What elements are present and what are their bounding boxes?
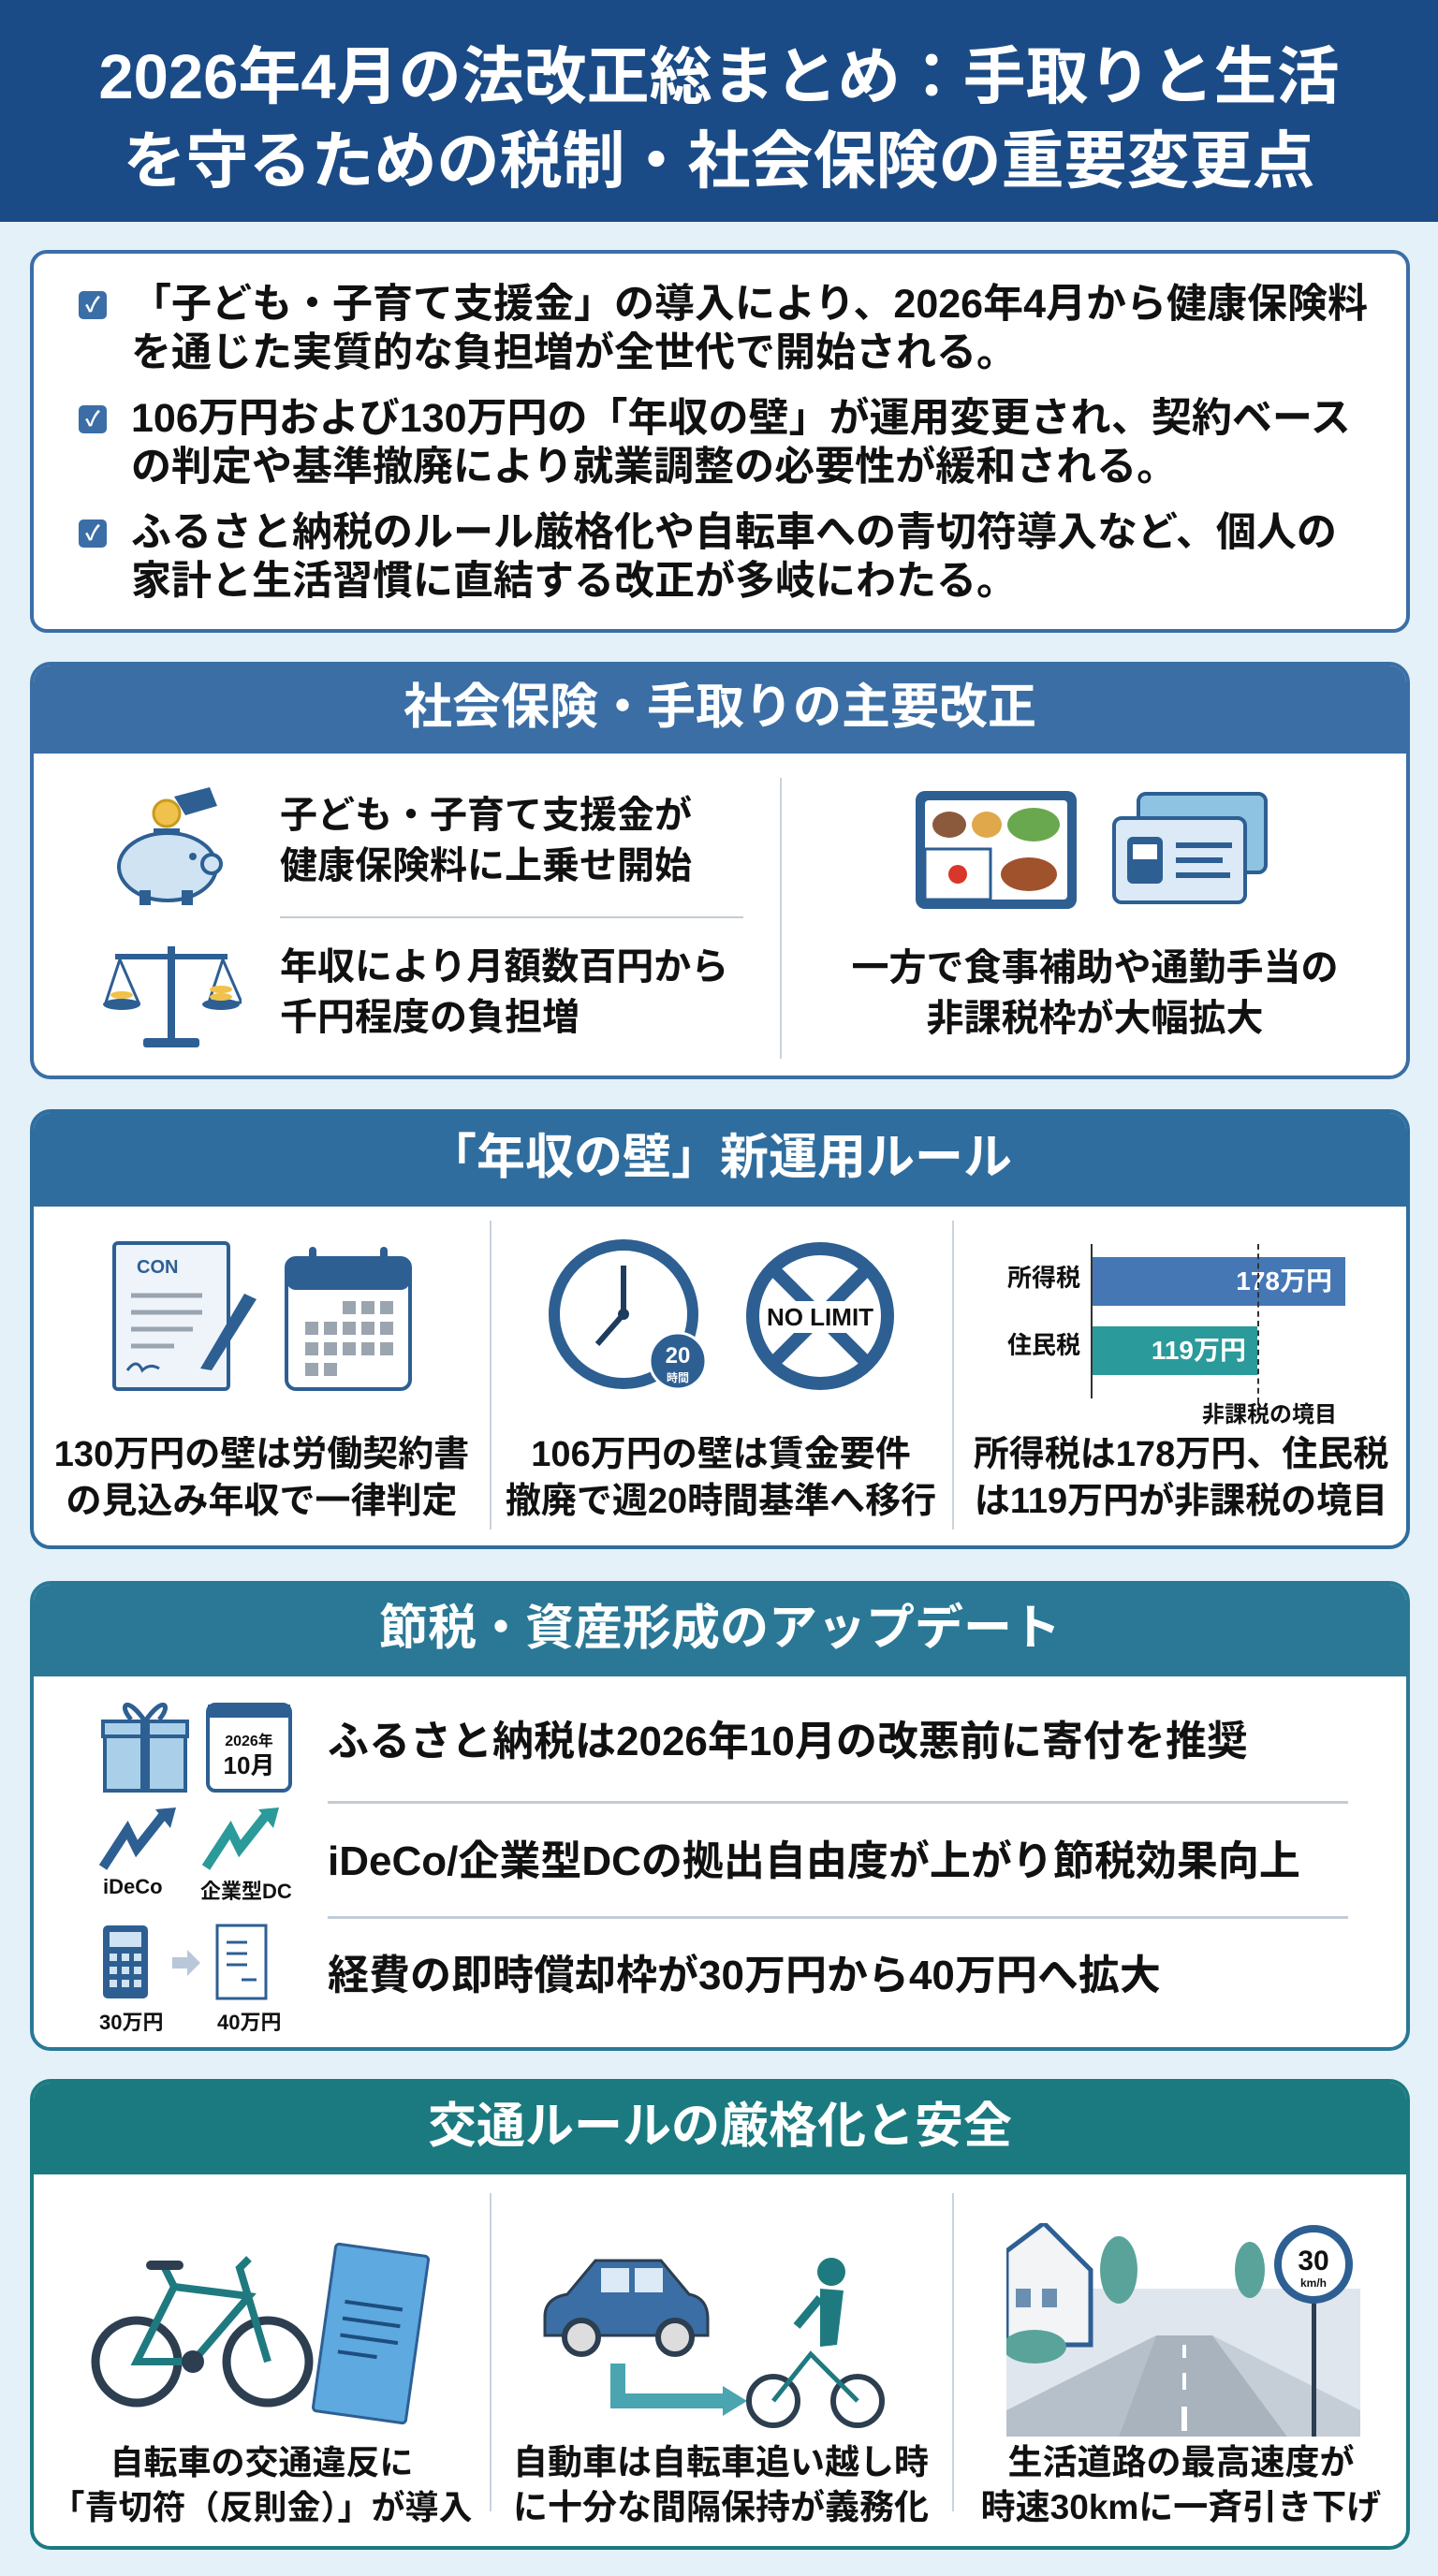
- caption: 106 wall: 撤廃で週20時間基準へ移行: [506, 1482, 936, 1521]
- panel: traffic rules: [30, 2079, 1410, 2550]
- icon: contract and calendar: CON: [137, 1257, 178, 1278]
- title banner: [0, 0, 1438, 222]
- checklist item 2: [79, 396, 1351, 490]
- checklist item 1: [79, 282, 1368, 375]
- icon: commuter pass: [1112, 792, 1268, 904]
- panel header: [34, 666, 1406, 754]
- text: burden increase: [280, 946, 728, 1038]
- text: support fee: [280, 795, 692, 886]
- icon: contract and calendar: [112, 1241, 412, 1391]
- summary box: [30, 250, 1410, 633]
- caption: 130 wall: の見込み年収で一律判定: [66, 1482, 457, 1521]
- caption: tax thresholds: は119万円が非課税の境目: [975, 1482, 1387, 1521]
- text: burden increase: 年収により月額数百円から: [280, 946, 728, 988]
- icon: calculator and receipt: [99, 1925, 281, 2034]
- bar chart: tax thresholds: 178万円: [1236, 1266, 1332, 1295]
- caption: speed limit: [981, 2443, 1381, 2526]
- icon: bicycle and blue ticket: [92, 2243, 430, 2424]
- text: tax-free allowances: 非課税枠が大幅拡大: [927, 998, 1264, 1039]
- checklist item 2: の判定や基準撤廃により就業調整の必要性が緩和される。: [131, 445, 1177, 490]
- panel header: 社会保険・手取りの主要改正: [404, 681, 1036, 735]
- caption: speed limit: 生活道路の最高速度が: [1007, 2443, 1354, 2481]
- icon: piggy bank: [117, 787, 223, 905]
- icon: gift and calendar: 10月: [224, 1751, 274, 1779]
- checklist item 1: 「子ども・子育て支援金」の導入により、2026年4月から健康保険料: [131, 282, 1368, 327]
- panel header: [34, 2083, 1406, 2174]
- text: iDeCo: iDeCo/企業型DCの拠出自由度が上がり節税効果向上: [328, 1838, 1300, 1884]
- caption: speed limit: 時速30kmに一斉引き下げ: [981, 2488, 1381, 2526]
- icon: bento box: [916, 791, 1077, 909]
- text: depreciation: 経費の即時償却枠が30万円から40万円へ拡大: [328, 1953, 1161, 1998]
- icon: clock 20 hours and no limit: [549, 1239, 894, 1390]
- caption: 106 wall: 106万円の壁は賃金要件: [531, 1435, 911, 1474]
- text: tax-free allowances: [852, 947, 1339, 1039]
- icon: car passing cyclist: [543, 2258, 885, 2428]
- icon: calculator and receipt: 30万円: [99, 2011, 163, 2034]
- checklist item 2: 106万円および130万円の「年収の壁」が運用変更され、契約ベース: [131, 396, 1351, 441]
- icon: residential road with 30 sign: [1006, 2223, 1360, 2437]
- panel: annual income wall: [30, 1109, 1410, 1549]
- text: tax-free allowances: 一方で食事補助や通勤手当の: [852, 947, 1339, 988]
- bar chart: tax thresholds: 119万円: [1152, 1336, 1246, 1365]
- caption: tax thresholds: 所得税は178万円、住民税: [974, 1435, 1388, 1474]
- icon: gift and calendar: [101, 1702, 292, 1793]
- checklist item 3: [79, 510, 1337, 604]
- panel header: 「年収の壁」新運用ルール: [428, 1131, 1012, 1185]
- bar chart: tax thresholds: 非課税の境目: [1202, 1402, 1337, 1427]
- text: support fee: 健康保険料に上乗せ開始: [280, 845, 692, 886]
- caption: 130 wall: 130万円の壁は労働契約書: [54, 1435, 469, 1474]
- panel header: 節税・資産形成のアップデート: [379, 1602, 1061, 1656]
- caption: tax thresholds: [974, 1435, 1388, 1521]
- icon: residential road with 30 sign: 30: [1298, 2246, 1329, 2276]
- title: を守るための税制・社会保険の重要変更点: [124, 126, 1314, 197]
- icon: clock 20 hours and no limit: 20: [666, 1343, 690, 1368]
- caption: passing distance: に十分な間隔保持が義務化: [513, 2488, 929, 2526]
- bar chart: tax thresholds: 住民税: [1007, 1331, 1080, 1359]
- caption: 106 wall: [506, 1435, 936, 1521]
- icon: clock 20 hours and no limit: 時間: [667, 1369, 689, 1385]
- icon: clock 20 hours and no limit: NO LIMIT: [767, 1303, 873, 1331]
- checklist item 1: ✓: [85, 293, 100, 316]
- bar chart: tax thresholds: 所得税: [1007, 1264, 1080, 1292]
- caption: blue ticket: 自転車の交通違反に: [110, 2443, 414, 2481]
- checklist item 3: ✓: [85, 521, 100, 545]
- icon: scale: [103, 946, 242, 1047]
- checklist item 3: ふるさと納税のルール厳格化や自転車への青切符導入など、個人の: [131, 510, 1337, 555]
- icon: residential road with 30 sign: km/h: [1300, 2276, 1327, 2290]
- bar chart: tax thresholds: [1007, 1244, 1345, 1427]
- icon: calculator and receipt: 40万円: [217, 2011, 281, 2034]
- panel header: [34, 1585, 1406, 1676]
- checklist item 1: を通じた実質的な負担増が全世代で開始される。: [131, 330, 1017, 375]
- panel header: 交通ルールの厳格化と安全: [428, 2100, 1012, 2154]
- panel header: [34, 1113, 1406, 1207]
- icon: growth arrows: 企業型DC: [200, 1880, 292, 1903]
- title: [98, 42, 1340, 197]
- caption: blue ticket: [51, 2443, 472, 2526]
- checklist item 2: ✓: [85, 407, 100, 431]
- text: burden increase: 千円程度の負担増: [280, 997, 580, 1038]
- icon: growth arrows: iDeCo: [103, 1875, 163, 1898]
- panel: social insurance: [30, 662, 1410, 1079]
- text: furusato: ふるさと納税は2026年10月の改悪前に寄付を推奨: [328, 1719, 1248, 1764]
- caption: passing distance: [513, 2443, 929, 2526]
- title: 2026年4月の法改正総まとめ：手取りと生活: [98, 42, 1340, 112]
- checklist item 3: 家計と生活習慣に直結する改正が多岐にわたる。: [131, 559, 1017, 604]
- text: support fee: 子ども・子育て支援金が: [280, 795, 692, 836]
- caption: passing distance: 自動車は自転車追い越し時: [513, 2443, 929, 2481]
- panel: tax saving and asset building: [30, 1581, 1410, 2051]
- icon: growth arrows: [99, 1808, 292, 1903]
- icon: gift and calendar: 2026年: [225, 1732, 273, 1749]
- caption: blue ticket: 「青切符（反則金）」が導入: [51, 2488, 472, 2526]
- caption: 130 wall: [54, 1435, 469, 1521]
